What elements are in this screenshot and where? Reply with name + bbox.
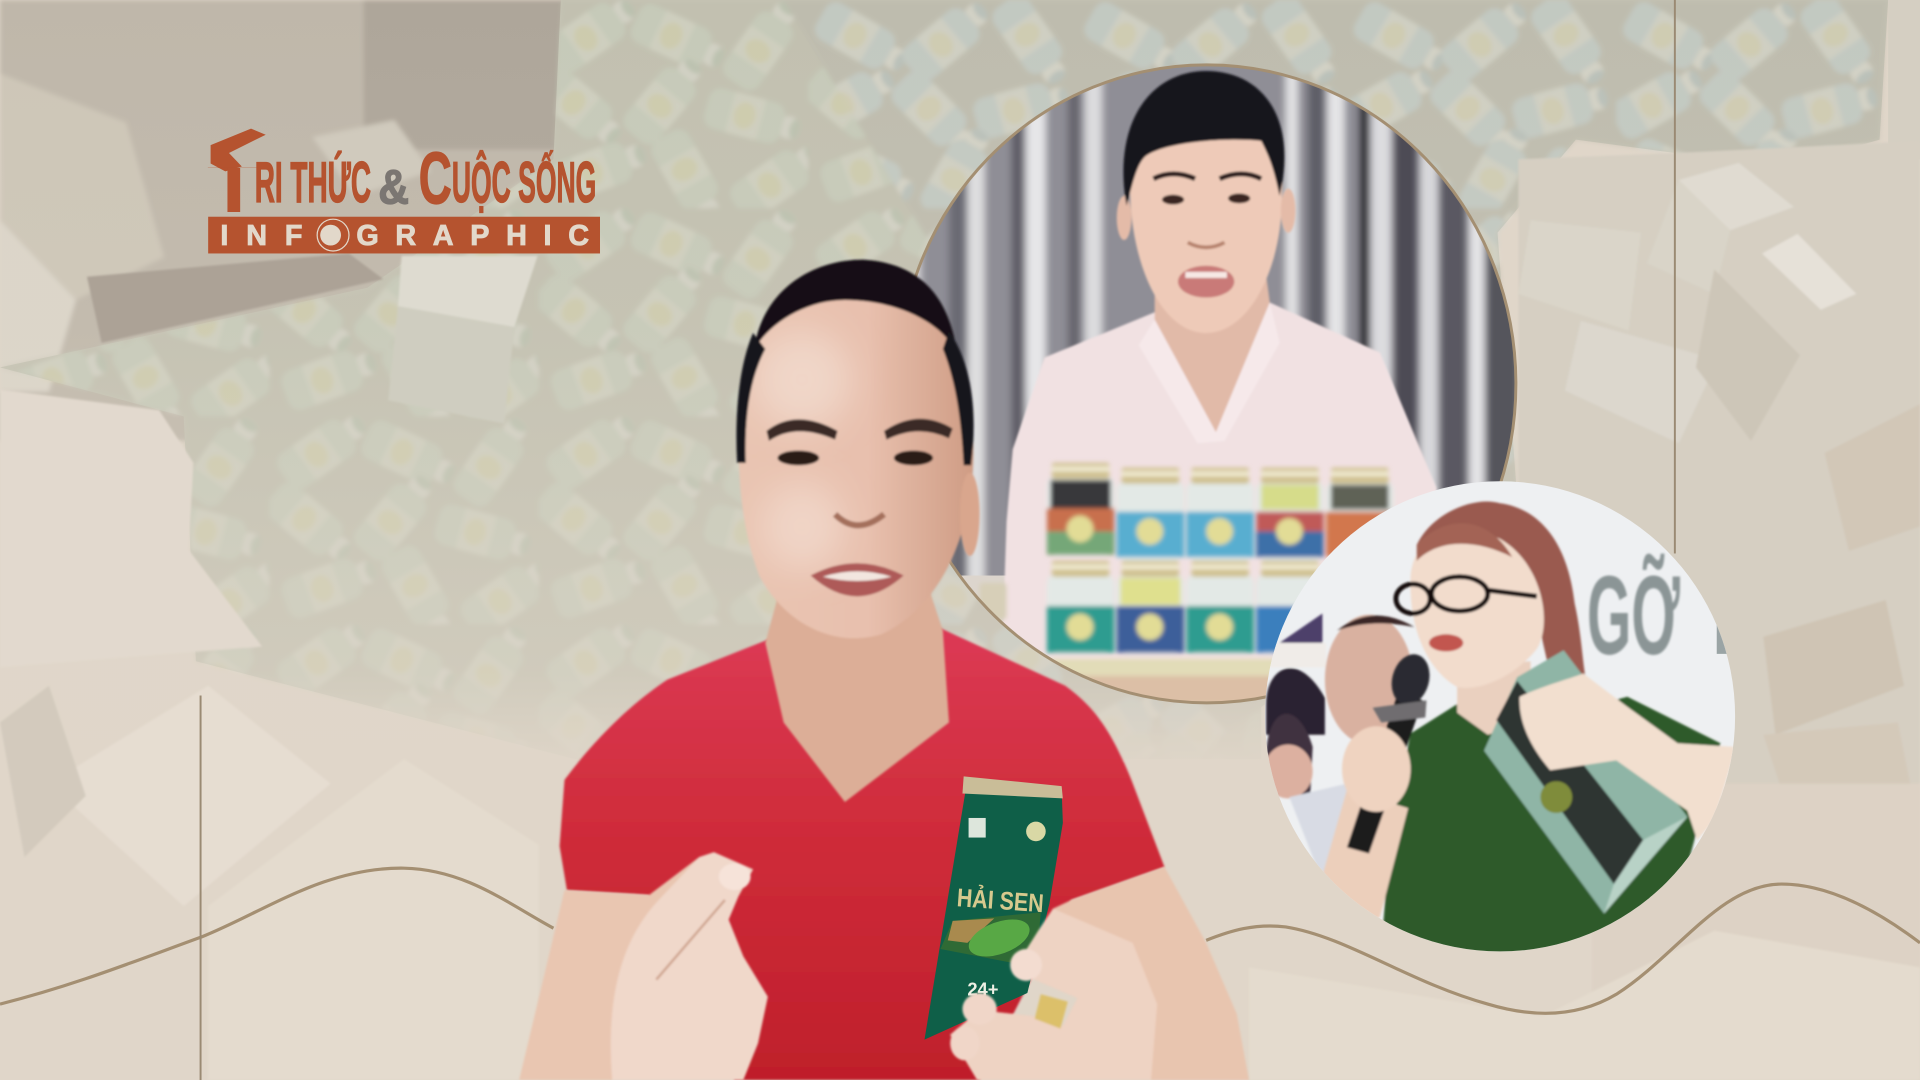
bottle pile — [0, 0, 1888, 759]
product box: 24+ — [967, 979, 999, 1000]
photo circle: woman with microphone — [1264, 481, 1736, 967]
logo wordmark: & — [378, 161, 409, 214]
decorative wave lines — [0, 868, 1920, 1013]
neck — [765, 576, 949, 802]
product box: HẢI SEN — [956, 882, 1045, 918]
woman — [1322, 502, 1736, 967]
logo wordmark: RI THỨC — [255, 151, 371, 215]
curtain backdrop — [917, 66, 1514, 576]
forearm holding mic — [1322, 790, 1408, 931]
green gift box — [1484, 650, 1687, 913]
logo stylised T — [208, 128, 266, 212]
logo wordmark: C — [419, 136, 452, 219]
left arm and finger-heart hand — [519, 852, 768, 1080]
logo: Tri thức & Cuộc sống Infographic — [207, 129, 600, 253]
photo circle: man with bird's nest jars — [888, 61, 1531, 710]
jar row three glass — [979, 582, 1272, 702]
background crowd — [1264, 613, 1414, 882]
head — [736, 260, 980, 638]
jars — [980, 463, 1393, 705]
jar row one — [1047, 463, 1393, 561]
logo stylised T: T — [207, 144, 261, 229]
microphone — [1347, 650, 1435, 853]
logo infographic banner — [208, 217, 600, 253]
backdrop text — [1588, 552, 1726, 656]
product box — [924, 776, 1063, 1040]
man in pink polo — [1000, 71, 1439, 704]
backdrop text: GỠ — [1587, 552, 1680, 678]
right hand and arm — [950, 867, 1249, 1080]
red t-shirt — [560, 628, 1164, 1080]
logo infographic banner: INF — [220, 220, 302, 252]
logo wordmark — [255, 136, 596, 219]
right hand and arm — [1520, 673, 1736, 840]
jar row two — [1047, 561, 1324, 654]
top-left room — [0, 0, 588, 441]
main presenter with HẢI SEN product — [519, 260, 1249, 1080]
bottle pile base — [0, 0, 1888, 759]
infographic canvas: UỘC SỐNG — [452, 150, 596, 215]
logo infographic banner: GRAPHIC — [356, 220, 589, 252]
